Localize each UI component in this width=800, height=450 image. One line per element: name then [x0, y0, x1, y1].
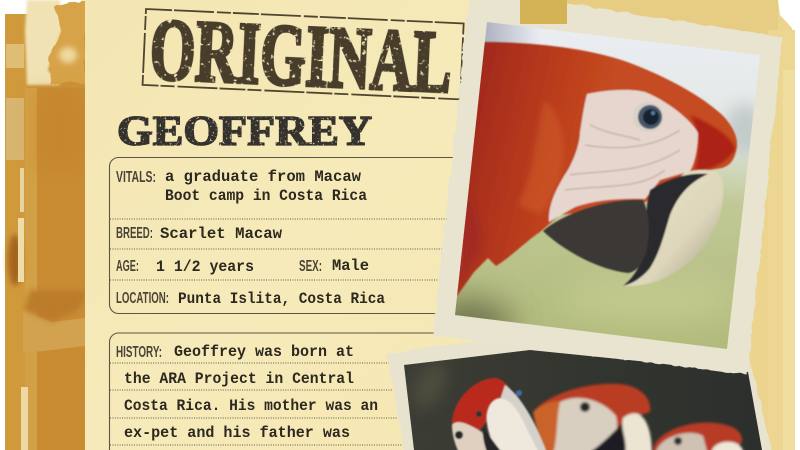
lower beak	[543, 200, 649, 273]
panel: history: Geoffrey was born at	[174, 343, 354, 361]
bare white face	[549, 90, 698, 222]
photo: three macaws	[387, 330, 773, 450]
vitals row: Boot camp in Costa Rica	[165, 187, 367, 205]
panel: history: the ARA Project in Central	[124, 370, 354, 388]
breed row: Scarlet Macaw	[160, 225, 283, 243]
age and sex row: 1 1/2 years	[156, 258, 254, 276]
panel: history: HISTORY:	[116, 344, 162, 361]
folder left edge with worn tape	[5, 0, 86, 450]
age and sex row: SEX:	[299, 258, 322, 275]
macaw left	[452, 378, 548, 450]
vitals row	[116, 168, 367, 205]
upper beak	[623, 170, 723, 286]
macaw head	[440, 40, 737, 300]
stamp: ORIGINAL: ORIGINAL	[148, 1, 454, 112]
heading: GEOFFREY: GEOFFREY	[117, 109, 372, 155]
tape strip	[520, 0, 567, 24]
panel: history	[110, 333, 470, 450]
vitals row: VITALS:	[116, 169, 156, 186]
panel: history: ex-pet and his father was	[124, 424, 350, 442]
photo: Geoffrey close-up	[423, 0, 783, 375]
age and sex row: AGE:	[116, 258, 139, 275]
panel: vitals	[110, 158, 510, 314]
plumage	[440, 40, 737, 300]
eye	[633, 102, 663, 132]
stamp: ORIGINAL	[142, 1, 464, 112]
main paper sheet	[85, 0, 566, 450]
macaw right	[653, 423, 743, 450]
panel: history: Costa Rica. His mother was an	[124, 397, 378, 415]
location row: Punta Islita, Costa Rica	[178, 290, 385, 308]
location row: LOCATION:	[116, 290, 169, 307]
vitals row: a graduate from Macaw	[165, 168, 362, 186]
age and sex row	[116, 257, 369, 276]
macaw middle	[533, 384, 652, 450]
breed row: BREED:	[116, 225, 153, 242]
age and sex row: Male	[332, 257, 369, 275]
